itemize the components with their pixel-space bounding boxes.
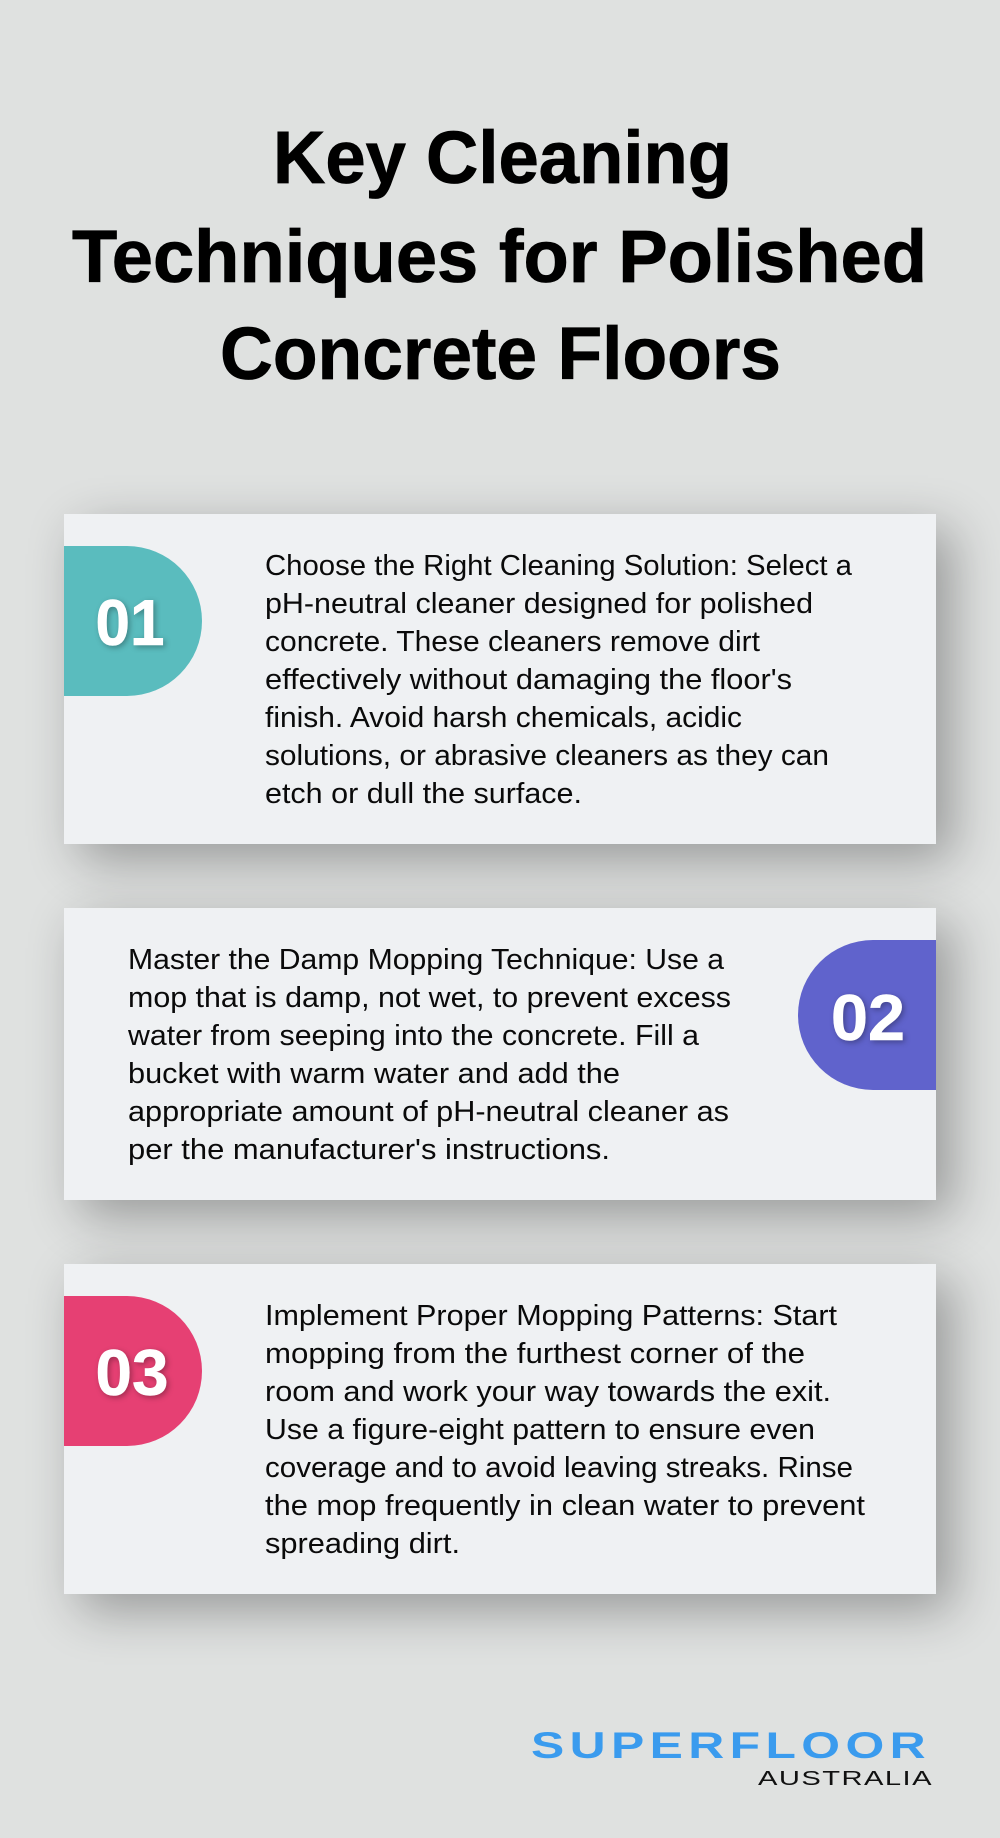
text block: card 1: finish. Avoid harsh chemicals, acidic — [265, 702, 742, 734]
badge: 01 — [64, 546, 202, 696]
text block: card 1: Choose the Right Cleaning Solution: Select a — [265, 550, 853, 582]
logo: Superfloor Australia — [531, 1725, 933, 1790]
panel: card 2 background — [64, 908, 936, 1200]
text block: card 1: concrete. These cleaners remove dirt — [265, 626, 760, 658]
text block: card 3: the mop frequently in clean water to prevent — [265, 1490, 865, 1522]
text block: card 1: etch or dull the surface. — [265, 778, 582, 810]
text block: card 3: coverage and to avoid leaving streaks. Rinse — [265, 1452, 853, 1484]
title — [72, 116, 927, 395]
text block: card 2: bucket with warm water and add the — [128, 1058, 620, 1090]
text block: card 3 — [265, 1300, 865, 1560]
text block: card 2: per the manufacturer's instructions. — [128, 1134, 610, 1166]
title: Concrete Floors — [220, 312, 781, 395]
text block: card 3: spreading dirt. — [265, 1528, 460, 1560]
text block: card 2: appropriate amount of pH-neutral cleaner as — [128, 1096, 729, 1128]
text block: card 1 — [265, 550, 853, 810]
badge: 03 — [64, 1296, 202, 1446]
logo: Superfloor Australia: AUSTRALIA — [758, 1768, 933, 1790]
badge: 02: 02 — [831, 981, 905, 1054]
text block: card 2: mop that is damp, not wet, to prevent excess — [128, 982, 731, 1014]
panel: card 3 background — [64, 1264, 936, 1594]
text block: card 2: Master the Damp Mopping Technique: Use a — [128, 944, 725, 976]
text block: card 3: room and work your way towards the exit. — [265, 1376, 831, 1408]
panel: card 1 background — [64, 514, 936, 844]
badge: 01: 01 — [96, 586, 164, 659]
logo: Superfloor Australia: SUPERFLOOR — [531, 1725, 931, 1766]
text block: card 1: pH-neutral cleaner designed for polished — [265, 588, 813, 620]
text block: card 2: water from seeping into the concrete. Fill a — [127, 1020, 700, 1052]
text block: card 3: Implement Proper Mopping Patterns: Start — [265, 1300, 837, 1332]
text block: card 3: Use a figure-eight pattern to ensure even — [265, 1414, 815, 1446]
title: Key Cleaning — [273, 116, 732, 199]
text block: card 1: solutions, or abrasive cleaners as they can — [265, 740, 829, 772]
title: Techniques for Polished — [72, 215, 927, 298]
text block: card 2 — [127, 944, 731, 1166]
text block: card 1: effectively without damaging the floor's — [265, 664, 792, 696]
badge: 03: 03 — [96, 1336, 168, 1409]
badge: 02 — [798, 940, 936, 1090]
text block: card 3: mopping from the furthest corner of the — [265, 1338, 805, 1370]
